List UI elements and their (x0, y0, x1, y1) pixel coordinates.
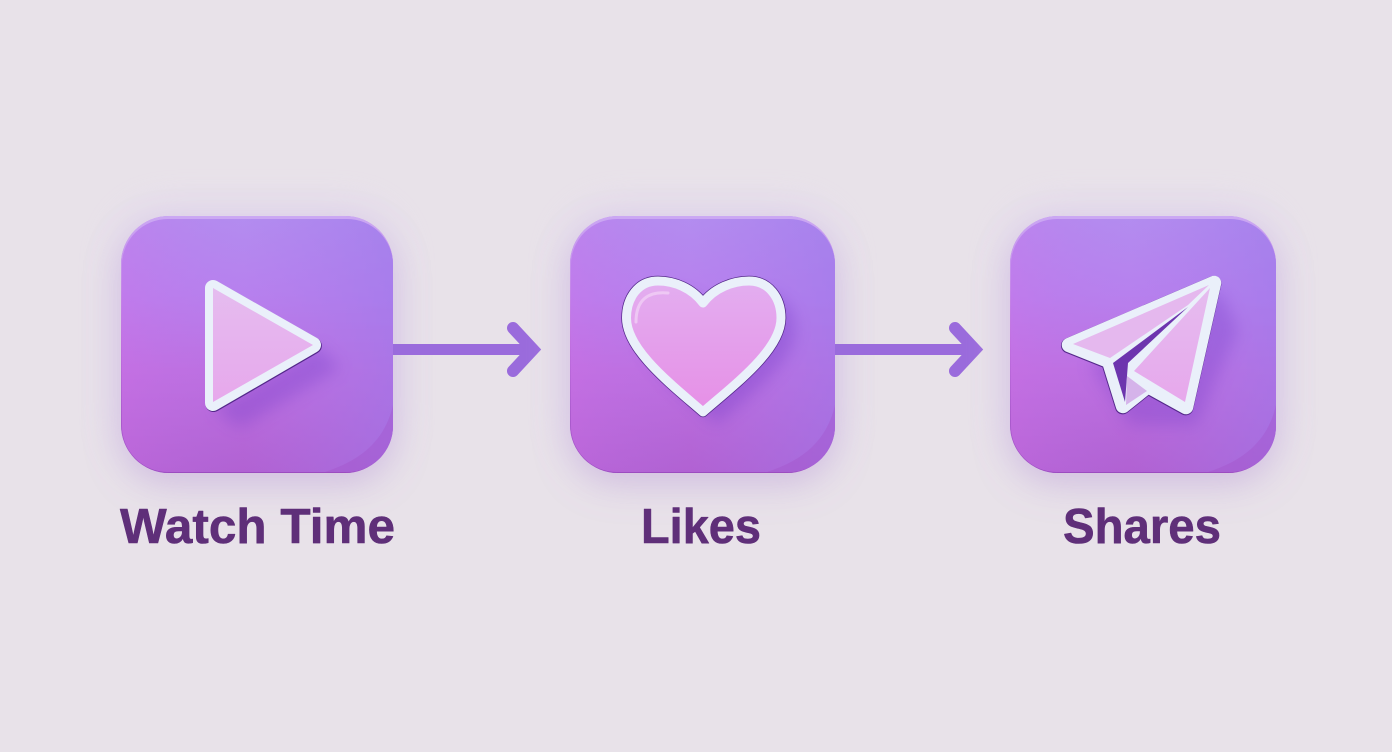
label: shares: Shares (1063, 500, 1221, 554)
label: likes: Likes (641, 500, 761, 554)
arrow: likes to shares (835, 328, 975, 371)
highlight on heart (636, 293, 668, 322)
plane right wing (1134, 288, 1210, 402)
plane fold gap (1113, 307, 1188, 402)
panel: shares card (1002, 204, 1284, 474)
panel: likes card (562, 204, 843, 474)
icon: paper plane (1069, 283, 1238, 425)
icon: heart (626, 281, 795, 424)
label: watch time: Watch Time (120, 500, 395, 554)
panel: watch time card (113, 204, 401, 474)
plane upper wing (1073, 285, 1209, 358)
plane lower fold (1126, 376, 1147, 405)
icon: play triangle (213, 288, 340, 428)
arrow: watch time to likes (393, 328, 533, 371)
